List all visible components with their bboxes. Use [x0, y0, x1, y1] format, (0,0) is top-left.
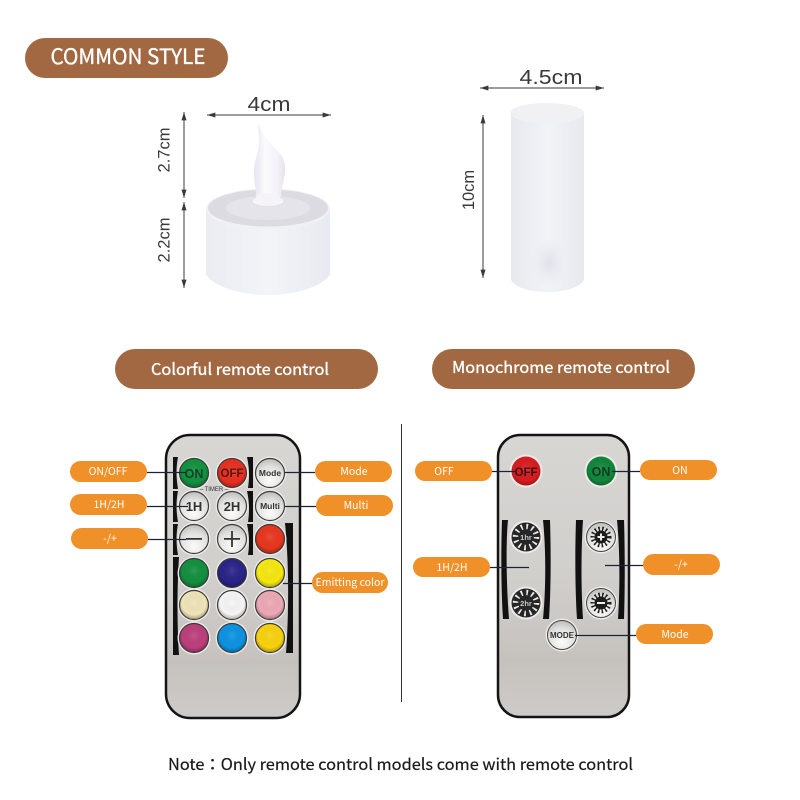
callout: ON/OFF	[70, 461, 186, 482]
colour buttons	[180, 458, 284, 652]
heading: common style: COMMON STYLE	[50, 41, 206, 71]
button labels: 1H	[186, 499, 202, 514]
callout: -/+ colorful: -/+	[103, 531, 117, 546]
button labels: Mode	[259, 468, 281, 478]
dimension: body height 2.2cm	[156, 202, 184, 288]
heading: monochrome remote control: Monochrome remote control	[452, 354, 670, 378]
callout: Mode colorful	[285, 461, 392, 482]
button: MODE: MODE	[550, 631, 575, 640]
dimension: cylinder height 10cm: 10cm	[460, 170, 478, 210]
callout: Emitting color	[283, 572, 388, 593]
callout: 1H/2H monochrome: 1H/2H	[436, 560, 468, 575]
button: OFF	[512, 456, 540, 486]
button halos	[178, 456, 286, 654]
remote body	[498, 435, 629, 717]
white buttons	[180, 458, 284, 554]
button labels: 2H	[224, 499, 240, 514]
frosted cylinder candle	[510, 103, 584, 292]
heading: monochrome remote control	[432, 349, 695, 389]
callout: Multi	[285, 495, 393, 516]
callout: ON/OFF: ON/OFF	[89, 464, 128, 479]
dimension: body height 2.2cm: 2.2cm	[156, 218, 174, 262]
note: Note：Only remote control models come with remote control	[168, 751, 633, 775]
callout: -/+ monochrome	[605, 554, 720, 575]
button: 1hr	[512, 522, 540, 552]
button halos	[510, 454, 618, 652]
colorful remote	[166, 435, 300, 718]
callout: ON	[612, 460, 717, 480]
remote body	[166, 435, 300, 718]
callout: Mode monochrome	[575, 624, 713, 644]
button shading	[180, 459, 284, 652]
button: 2hr: 2hr	[520, 599, 532, 608]
button group brackets	[173, 457, 293, 655]
button labels: Multi	[260, 501, 280, 511]
button: brightness plus	[586, 522, 616, 552]
button: MODE	[548, 620, 576, 650]
heading: colorful remote control	[115, 349, 378, 389]
heading: common style	[25, 38, 228, 78]
callout: 1H/2H colorful	[70, 494, 188, 515]
callout: Multi: Multi	[344, 498, 368, 513]
dimension: flame height 2.7cm	[156, 112, 184, 198]
button group brackets	[501, 520, 625, 619]
dimension: tea light width 4cm: 4cm	[248, 94, 290, 116]
callout: ON: ON	[672, 463, 688, 478]
dimension: cylinder width 4.5cm: 4.5cm	[520, 67, 582, 89]
button: 1hr: 1hr	[520, 533, 532, 542]
callout: OFF: OFF	[434, 464, 454, 479]
callout: Mode monochrome: Mode	[661, 627, 689, 642]
callout: Emitting color: Emitting color	[316, 575, 385, 590]
dimension: flame height 2.7cm: 2.7cm	[156, 128, 174, 172]
timer label: – TIMER –	[200, 487, 229, 493]
callout: 1H/2H colorful: 1H/2H	[93, 497, 125, 512]
callout: 1H/2H monochrome	[413, 557, 529, 577]
tea light candle with flame	[206, 123, 330, 295]
button labels: OFF	[220, 468, 244, 480]
button: OFF: OFF	[514, 467, 538, 479]
callout: OFF	[415, 461, 516, 481]
button labels: ON	[185, 467, 203, 481]
button labels	[185, 467, 281, 547]
dimension: cylinder width 4.5cm	[480, 67, 604, 89]
callout: Mode colorful: Mode	[340, 464, 368, 479]
callout: -/+ colorful	[71, 528, 186, 549]
heading: colorful remote control: Colorful remote control	[151, 356, 329, 380]
button: ON	[586, 456, 616, 486]
button: 2hr	[512, 588, 540, 618]
callout: -/+ monochrome: -/+	[674, 557, 688, 572]
monochrome remote	[498, 435, 629, 717]
dimension: tea light width 4cm	[207, 94, 331, 116]
button: brightness minus	[586, 588, 616, 618]
button: ON: ON	[592, 465, 610, 479]
